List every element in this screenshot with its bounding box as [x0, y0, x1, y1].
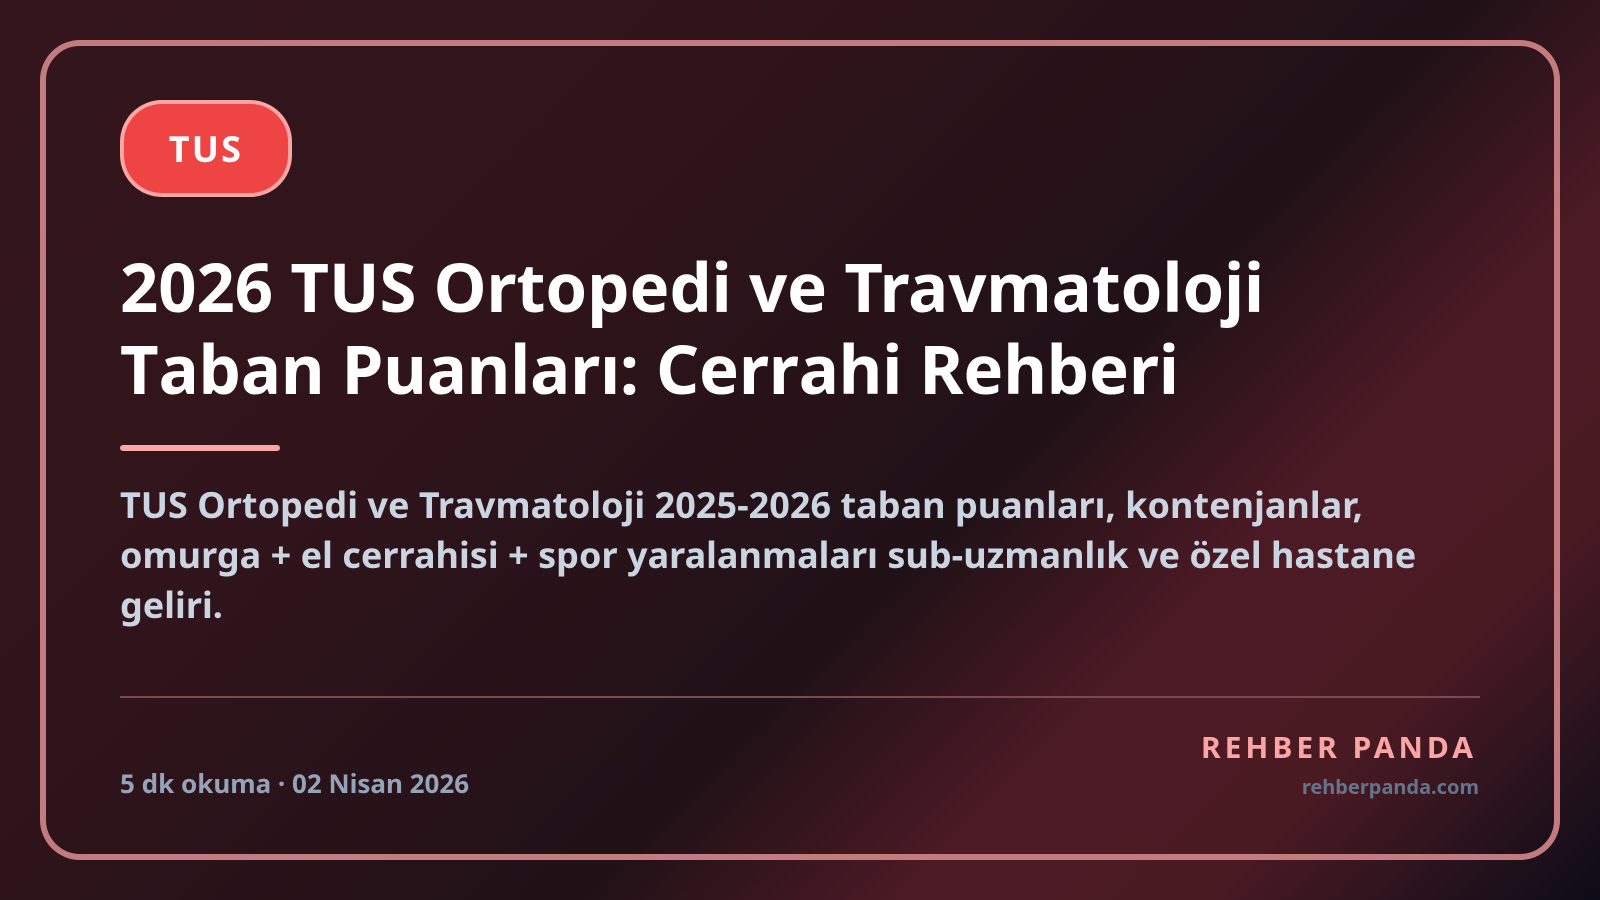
title: 2026 TUS Ortopedi ve Travmatoloji [120, 240, 1264, 332]
subtitle text block: TUS Ortopedi ve Travmatoloji 2025-2026 taban puanları, kontenjanlar, [120, 480, 1363, 529]
title: Taban Puanları: Cerrahi Rehberi [120, 322, 1179, 414]
accent bar [120, 445, 280, 451]
brand url: rehberpanda.com [1302, 773, 1479, 800]
badge: TUS: TUS [169, 124, 243, 173]
badge: TUS [120, 100, 292, 197]
brand name: REHBER PANDA [1201, 726, 1477, 767]
subtitle text block [120, 480, 1416, 629]
subtitle text block: omurga + el cerrahisi + spor yaralanmaları sub-uzmanlık ve özel hastane [120, 530, 1416, 579]
subtitle text block: geliri. [120, 580, 223, 629]
title [120, 240, 1264, 414]
reading time and date: 5 dk okuma · 02 Nisan 2026 [120, 765, 469, 801]
